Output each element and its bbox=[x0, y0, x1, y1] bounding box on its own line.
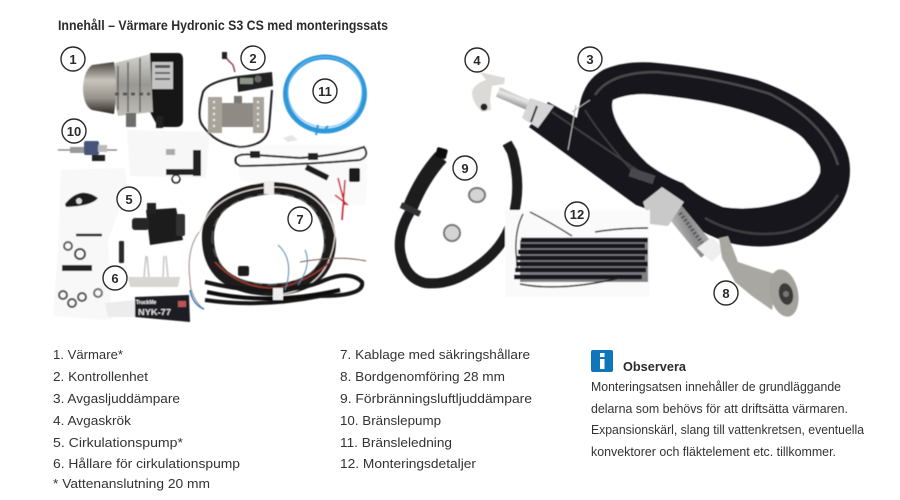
badge 12 bbox=[565, 202, 589, 226]
badge 9 bbox=[453, 156, 477, 180]
parts list column 2 bbox=[340, 347, 532, 471]
parts list column 1: 4. Avgaskrök bbox=[53, 413, 132, 428]
badge 8 bbox=[714, 281, 738, 305]
badge 2 bbox=[241, 46, 265, 70]
badge 1: 1 bbox=[69, 52, 77, 67]
parts list column 1: 2. Kontrollenhet bbox=[53, 369, 148, 384]
note body bbox=[591, 379, 865, 459]
badge 1 bbox=[61, 47, 85, 71]
badge 11 bbox=[313, 79, 337, 103]
part 4: exhaust elbow bbox=[472, 72, 554, 128]
fuse holder cable bbox=[235, 147, 366, 182]
parts list column 2: 12. Monteringsdetaljer bbox=[340, 456, 477, 471]
parts list column 1 bbox=[53, 347, 240, 491]
panel: parts photo right bbox=[400, 62, 850, 319]
badge 7: 7 bbox=[296, 212, 304, 227]
parts list column 2: 7. Kablage med säkringshållare bbox=[340, 347, 530, 362]
note body: delarna som behövs för att driftsätta värmaren. bbox=[591, 401, 848, 416]
badge 4: 4 bbox=[473, 53, 481, 68]
plastic bags bbox=[53, 130, 368, 320]
parts list column 2: 9. Förbränningsluftljuddämpare bbox=[340, 391, 532, 406]
note: Observera bbox=[591, 350, 865, 459]
badge 5: 5 bbox=[125, 192, 133, 207]
badge 8: 8 bbox=[722, 286, 730, 301]
parts list column 2: 10. Bränslepump bbox=[340, 413, 441, 428]
part 1: heater bbox=[83, 53, 183, 128]
note heading: Observera bbox=[623, 360, 687, 374]
badge 12: 12 bbox=[570, 207, 584, 222]
sealant tube bbox=[105, 295, 190, 322]
bag with fittings bbox=[166, 149, 197, 183]
badge 3 bbox=[578, 47, 602, 71]
parts list column 1: 3. Avgasljuddämpare bbox=[53, 391, 180, 406]
part 9: combustion air silencer bbox=[400, 143, 517, 283]
part 7: wiring harness bbox=[189, 178, 366, 309]
parts list column 1: 6. Hållare för cirkulationspump bbox=[53, 456, 240, 471]
parts list column 2: 8. Bordgenomföring 28 mm bbox=[340, 369, 505, 384]
part 2: control unit bbox=[200, 52, 273, 147]
parts list column 1: 1. Värmare* bbox=[53, 347, 123, 362]
badge 3: 3 bbox=[586, 52, 594, 67]
part 5: circulation pump bbox=[132, 203, 185, 245]
badge 5 bbox=[117, 187, 141, 211]
part 6: pump bracket bbox=[119, 241, 180, 287]
part 11: fuel line bbox=[283, 57, 364, 142]
part 10: fuel pump bbox=[58, 141, 117, 161]
note body: Expansionskärl, slang till vattenkretsen, eventuella bbox=[591, 422, 865, 437]
badge 4 bbox=[465, 48, 489, 72]
badge 9: 9 bbox=[461, 161, 469, 176]
parts list column 1: * Vattenanslutning 20 mm bbox=[53, 476, 210, 491]
badge 10 bbox=[62, 119, 86, 143]
badge 6: 6 bbox=[111, 271, 119, 286]
badge 6 bbox=[103, 266, 127, 290]
part 12: cable ties bbox=[505, 210, 650, 297]
badge 2: 2 bbox=[249, 51, 257, 66]
part 3: exhaust silencer hose bbox=[529, 62, 850, 246]
note body: konvektorer och fläktelement etc. tillkommer. bbox=[591, 444, 836, 459]
number badges bbox=[61, 46, 738, 305]
badge 7 bbox=[288, 207, 312, 231]
small bag parts bbox=[59, 193, 102, 307]
badge 10: 10 bbox=[67, 124, 81, 139]
icon: info bbox=[591, 350, 613, 372]
parts list column 2: 11. Bränsleledning bbox=[340, 435, 452, 450]
note body: Monteringsatsen innehåller de grundläggande bbox=[591, 379, 841, 394]
badge 11: 11 bbox=[318, 84, 332, 99]
sealant tube: TruckMe bbox=[136, 300, 157, 306]
title: Innehåll – Värmare Hydronic S3 CS med monteringssats bbox=[58, 18, 388, 33]
parts list column 1: 5. Cirkulationspump* bbox=[53, 435, 183, 450]
sealant tube: NYK-77 bbox=[138, 307, 171, 317]
part 8: hull fitting bbox=[643, 187, 803, 319]
panel: parts photo left bbox=[53, 52, 368, 322]
